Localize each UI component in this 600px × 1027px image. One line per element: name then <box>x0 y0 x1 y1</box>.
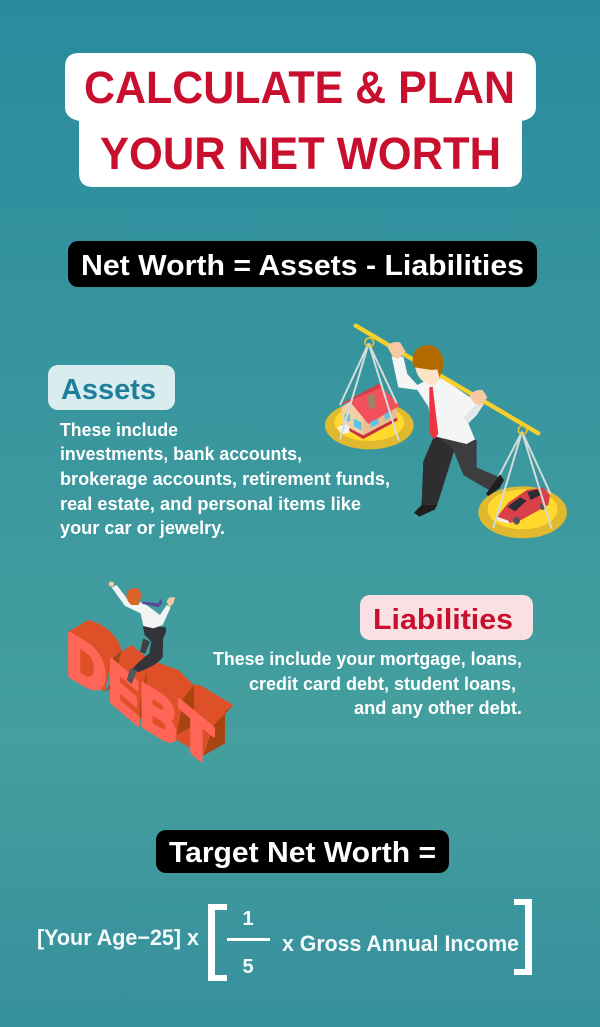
title <box>65 53 536 187</box>
right pan <box>478 486 567 538</box>
assets description: real estate, and personal items like <box>60 494 361 514</box>
shirt and arms <box>112 585 171 628</box>
target net worth formula <box>37 899 532 981</box>
liabilities description <box>213 649 522 718</box>
head <box>413 345 443 385</box>
liabilities description: These include your mortgage, loans, <box>213 649 522 669</box>
target net worth heading: Target Net Worth = <box>169 837 436 869</box>
fraction: 1 <box>242 908 254 930</box>
assets description: investments, bank accounts, <box>60 444 302 464</box>
trousers <box>127 625 166 684</box>
house <box>337 384 400 439</box>
left bracket <box>208 904 227 981</box>
assets label <box>48 365 175 410</box>
title: CALCULATE & PLAN <box>84 62 515 113</box>
net worth formula heading: Net Worth = Assets - Liabilities <box>81 250 524 282</box>
letter extrusions <box>68 620 233 756</box>
liabilities description: and any other debt. <box>354 698 522 718</box>
illustration: man leaping on 3D debt letters <box>67 581 233 784</box>
carrying pole <box>356 326 538 433</box>
trousers <box>414 434 504 517</box>
hands <box>109 581 175 607</box>
DEBT front faces: E <box>109 644 139 739</box>
pole rings <box>365 338 527 434</box>
net worth formula heading <box>68 241 537 287</box>
target net worth formula: [Your Age−25] x <box>37 925 200 950</box>
DEBT front faces <box>67 620 214 784</box>
assets description: your car or jewelry. <box>60 518 225 538</box>
tie <box>142 598 162 607</box>
chains <box>340 343 552 529</box>
target net worth formula: x Gross Annual Income <box>282 931 519 956</box>
title: YOUR NET WORTH <box>100 128 501 179</box>
DEBT front faces: D <box>67 620 106 711</box>
assets description <box>60 420 390 538</box>
liabilities description: credit card debt, student loans, <box>249 674 516 694</box>
liabilities label: Liabilities <box>373 604 513 636</box>
target net worth heading <box>156 830 449 873</box>
DEBT front faces: T <box>179 688 214 784</box>
right bracket <box>514 899 532 975</box>
assets label: Assets <box>61 374 156 406</box>
hair <box>126 588 141 605</box>
car <box>497 488 550 525</box>
hands <box>387 342 487 406</box>
assets description: brokerage accounts, retirement funds, <box>60 469 390 489</box>
left pan <box>325 401 414 449</box>
fraction <box>227 908 270 978</box>
assets description: These include <box>60 420 178 440</box>
illustration: man carrying scales with house and car <box>325 326 567 538</box>
liabilities label <box>360 595 533 640</box>
shirt <box>392 357 484 444</box>
tie <box>429 387 438 439</box>
DEBT front faces: B <box>140 669 177 760</box>
fraction: 5 <box>242 956 254 978</box>
